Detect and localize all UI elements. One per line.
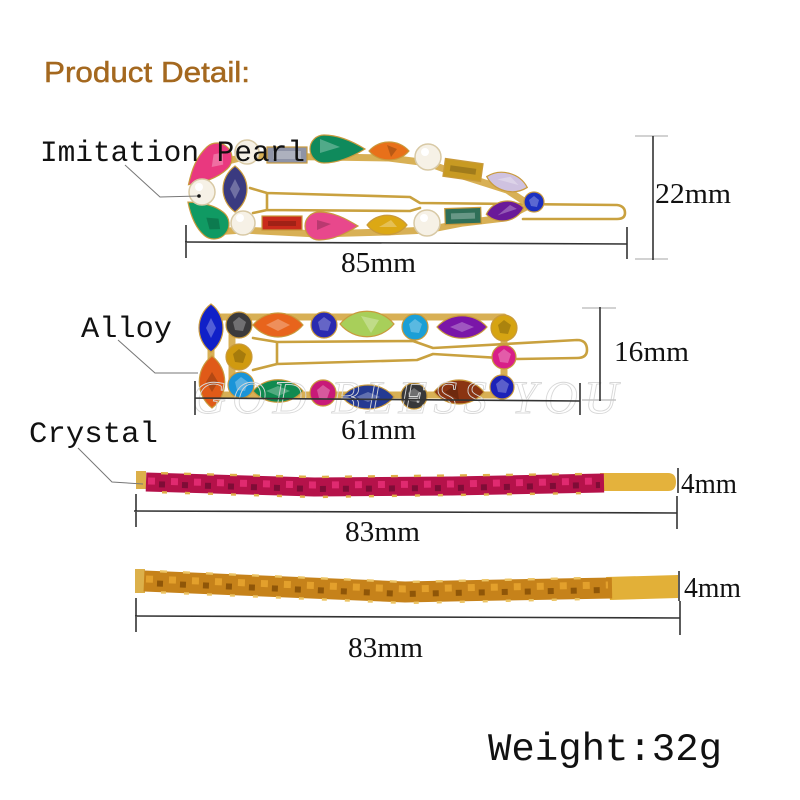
dimension: second 4mm: 4mm: [684, 572, 741, 604]
dimension: 22mm: 22mm: [655, 178, 731, 210]
weight: Weight:32g: [488, 728, 722, 772]
clip 1 frame: [213, 156, 530, 234]
hair clip: rectangle with mixed gems: [199, 304, 587, 409]
dimension: 85mm: 85mm: [341, 247, 416, 279]
red gem facets: [148, 481, 600, 489]
clip 1 gems: [178, 135, 544, 245]
label: Alloy: Alloy: [81, 313, 172, 347]
label: Alloy: [81, 313, 198, 373]
dimension: 16mm: [582, 307, 689, 401]
amber gem facets: [146, 579, 608, 594]
pin tail: [600, 473, 676, 491]
amber gem prongs: [152, 571, 589, 603]
label: Crystal: Crystal: [29, 418, 158, 452]
pin tail: [606, 575, 678, 600]
clip 2 gems: [199, 304, 517, 409]
red gem prongs: [153, 473, 590, 497]
hair pin: red crystal: [136, 471, 676, 497]
watermark: GOD BLESS YOU: [192, 372, 621, 424]
label: Imitation Pearl: [40, 137, 305, 198]
clip 2 wire: [253, 338, 587, 370]
label: Crystal: [29, 418, 158, 484]
title: Product Detail:: [44, 57, 250, 89]
dimension: 85mm: [185, 225, 627, 279]
clip 1 wire: [250, 188, 625, 219]
amber gem band: [144, 581, 612, 592]
dimension: first 83mm: [134, 494, 677, 548]
pin end cap: [135, 569, 145, 593]
label: Imitation Pearl: Imitation Pearl: [40, 137, 305, 171]
clip 2 frame: [211, 317, 504, 395]
dimension: 22mm: [635, 136, 731, 260]
hair pin: amber crystal: [135, 569, 678, 603]
dimension: 61mm: 61mm: [341, 414, 416, 446]
dimension: 61mm: [195, 381, 580, 446]
dimension: second 83mm: 83mm: [348, 632, 423, 664]
dimension: first 4mm: 4mm: [681, 468, 737, 500]
pin end cap: [136, 471, 146, 489]
dimension: 16mm: 16mm: [614, 336, 689, 368]
red gem band: [146, 482, 604, 487]
dimension: first 83mm: 83mm: [345, 516, 420, 548]
hair clip: triangle with mixed gems and pearls: [178, 135, 625, 245]
dimension: second 83mm: [135, 598, 680, 664]
